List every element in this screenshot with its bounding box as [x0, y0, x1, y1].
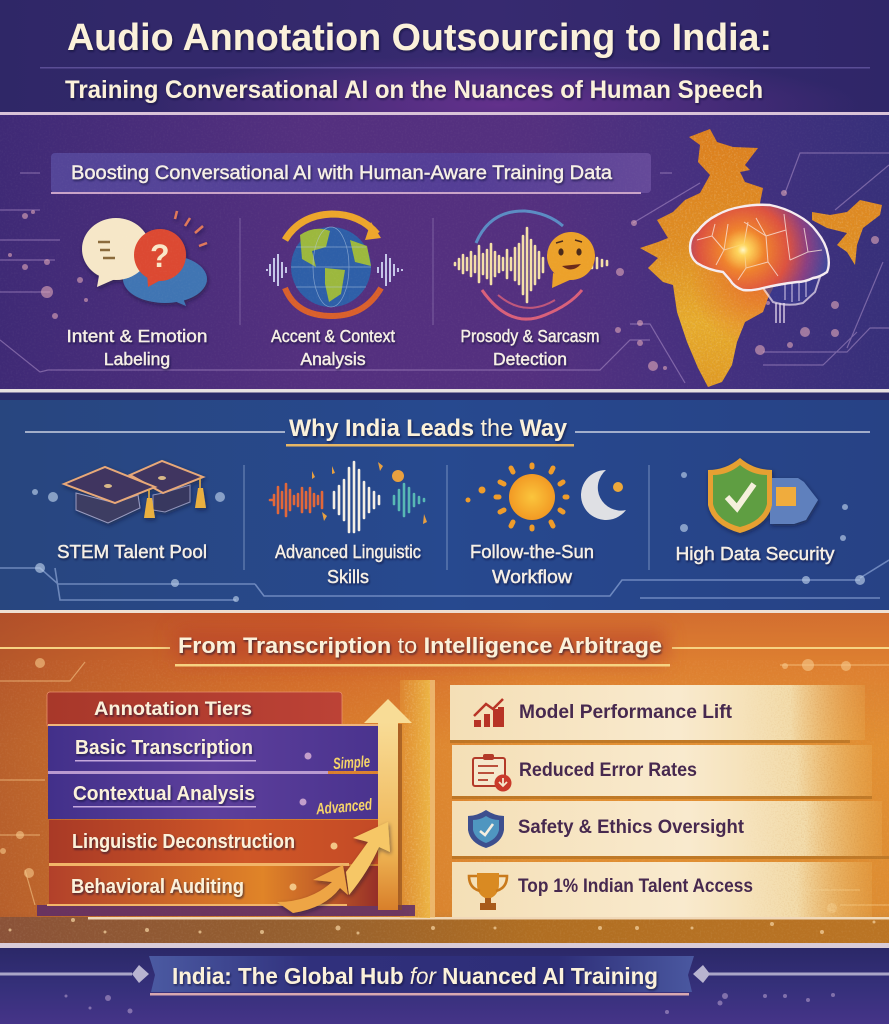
icon: sun and moon	[466, 465, 626, 529]
label: accent and context: Accent & Context	[271, 326, 395, 346]
subtitle: Training Conversational AI on the Nuances of Human Speech	[65, 76, 763, 104]
title: Audio Annotation Outsourcing to India:	[67, 17, 772, 59]
panel: why India leads the way	[0, 393, 889, 611]
panel: boosting conversational AI	[0, 115, 889, 390]
heading: From Transcription to Intelligence Arbitrage	[178, 633, 662, 658]
label: prosody and sarcasm: Detection	[493, 349, 567, 369]
tier stack	[37, 692, 415, 916]
heading: Why India Leads the Way	[289, 415, 568, 442]
arrow: rising curved arrows	[277, 822, 390, 913]
label: advanced linguistic skills: Advanced Linguistic	[275, 541, 421, 562]
label: STEM talent pool: STEM Talent Pool	[57, 541, 207, 562]
panel: transcription to intelligence	[0, 613, 889, 944]
tier stack: Basic Transcription	[75, 737, 253, 759]
tier stack: Annotation Tiers	[94, 698, 252, 720]
benefit cards	[450, 685, 889, 917]
icon: glowing brain	[690, 205, 829, 323]
arrow: vertical progression	[364, 699, 412, 910]
card: top 1% Indian talent access	[469, 873, 753, 910]
icon: graduation caps	[64, 461, 206, 523]
decorations: texture grain	[0, 115, 889, 389]
icon: speech bubbles: ?	[150, 238, 170, 274]
tier stack: Behavioral Auditing	[71, 876, 244, 898]
banner: Boosting Conversational AI with Human-Aware Training Data	[71, 162, 612, 184]
arrow: right	[693, 965, 889, 983]
panel: footer	[0, 948, 889, 1024]
card: top 1% Indian talent access: Top 1% Indian Talent Access	[518, 875, 753, 897]
panel: header	[0, 0, 889, 155]
arrow: left	[0, 965, 149, 983]
card: model performance lift: Model Performance Lift	[519, 701, 732, 723]
label: accent and context: Analysis	[300, 349, 366, 369]
label: intent and emotion: Intent & Emotion	[66, 326, 208, 346]
icon: globe with accents	[266, 214, 402, 316]
label: simple: Simple	[333, 754, 371, 773]
icon: waveform and emoji	[455, 211, 607, 319]
footer banner: India: The Global Hub for Nuanced AI Training	[172, 963, 658, 989]
card: reduced error rates	[473, 754, 697, 792]
label: advanced: Advanced	[315, 797, 374, 818]
label: high data security: High Data Security	[676, 543, 835, 564]
icon: security shield	[708, 458, 818, 533]
tier stack: Linguistic Deconstruction	[72, 831, 295, 853]
bottom speckled band	[0, 917, 889, 944]
column beside benefit cards	[400, 680, 435, 918]
label: advanced linguistic skills: Skills	[327, 566, 369, 587]
footer banner	[149, 956, 694, 996]
label: intent and emotion: Labeling	[104, 349, 170, 369]
icon: map of India	[635, 125, 889, 390]
label: follow-the-sun workflow: Workflow	[492, 566, 573, 587]
card: safety and ethics oversight: Safety & Ethics Oversight	[518, 816, 744, 838]
label: prosody and sarcasm: Prosody & Sarcasm	[460, 326, 600, 346]
icon: speech bubbles	[82, 211, 207, 306]
card: reduced error rates: Reduced Error Rates	[519, 759, 697, 781]
tier stack: Contextual Analysis	[73, 783, 255, 805]
banner	[51, 153, 651, 194]
decorations: sparkles around waveform	[312, 462, 427, 524]
heading	[175, 630, 670, 666]
card: model performance lift	[474, 699, 732, 727]
label: follow-the-sun workflow: Follow-the-Sun	[470, 541, 594, 562]
card: safety and ethics oversight	[468, 810, 744, 848]
icon: multicolour waveform	[270, 462, 424, 532]
